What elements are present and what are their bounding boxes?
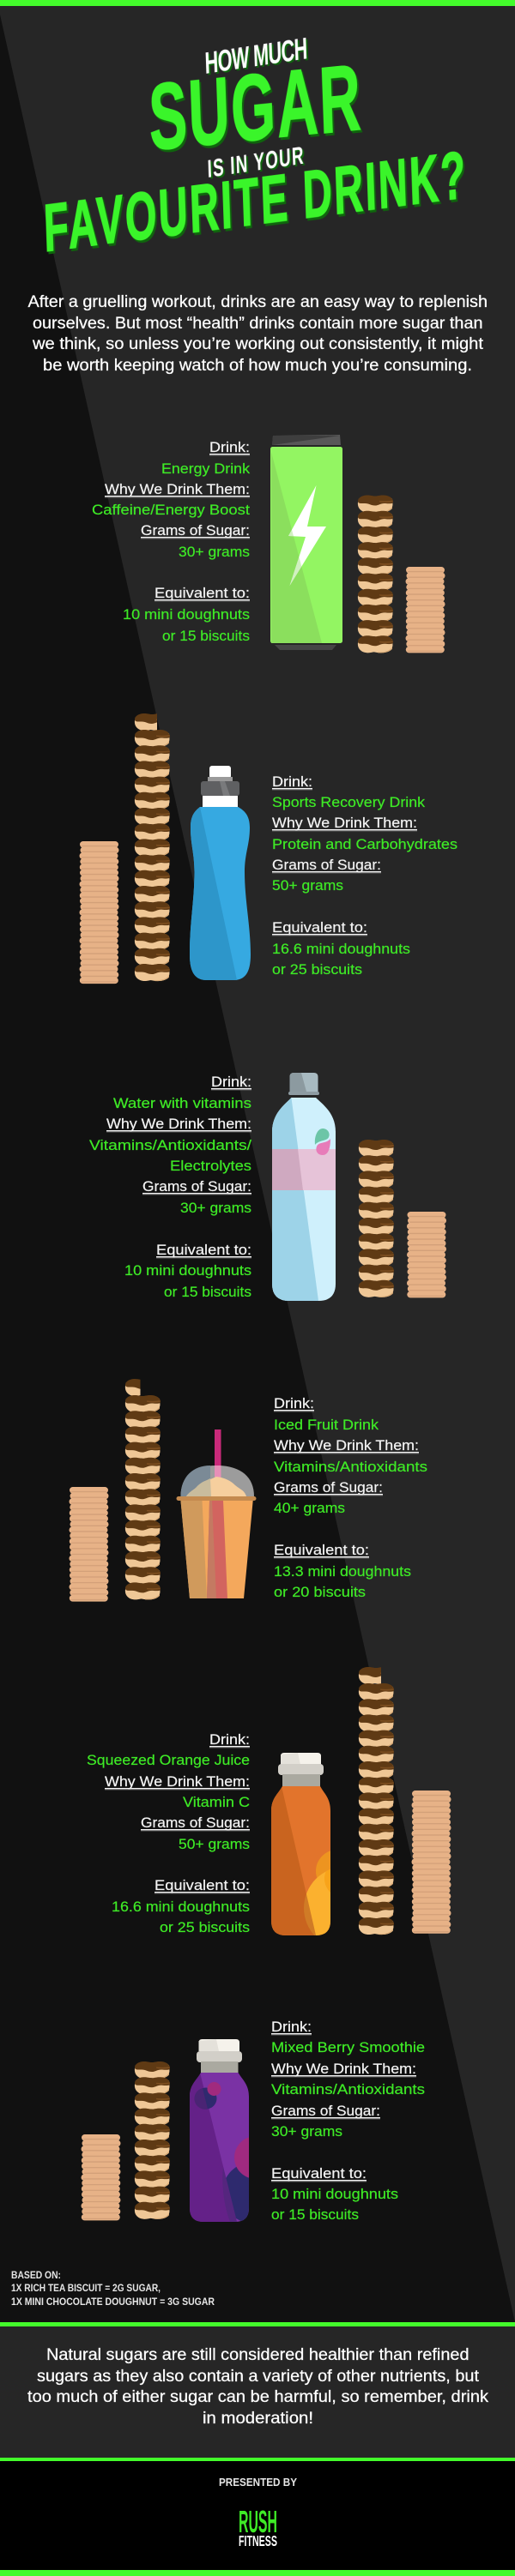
panel: footer: RUSH (239, 2504, 277, 2539)
panel: sports recovery drink (79, 713, 457, 984)
text block: water facts: or 15 biscuits (164, 1284, 251, 1300)
doughnut stack: 10 (359, 1140, 394, 1297)
text block: iced fruit facts: Grams of Sugar: (274, 1479, 383, 1496)
intro text: we think, so unless you’re working out consistently, it might (32, 335, 484, 353)
text block: smoothie facts: Equivalent to: (271, 2165, 367, 2182)
text block: sports recovery facts: Sports Recovery Drink (272, 794, 426, 810)
text block: energy drink facts: Drink: (209, 439, 250, 455)
icon: smoothie bottle (190, 2039, 249, 2222)
doughnut stack: 10 (358, 496, 393, 653)
text block: sports recovery facts (272, 773, 457, 978)
bottom green bar (0, 2570, 515, 2576)
panel: water with vitamins (89, 1073, 446, 1301)
panel: footer (0, 2461, 515, 2570)
icon: sports bottle (190, 766, 251, 980)
conclusion text: in moderation! (203, 2410, 313, 2428)
logo: rush fitness (239, 2504, 277, 2549)
title line: is in your: IS IN YOUR (207, 142, 304, 184)
text block: orange juice facts: Grams of Sugar: (141, 1815, 250, 1831)
title line: favourite drink: FAVOURITE DRINK? (43, 137, 466, 266)
text block: orange juice facts: 16.6 mini doughnuts (112, 1899, 250, 1915)
text block: iced fruit facts: Why We Drink Them: (274, 1437, 419, 1454)
biscuit stack: 25 (79, 841, 118, 984)
panel: iced fruit drink (69, 1379, 427, 1602)
doughnut stack: 16.6 (135, 713, 170, 981)
panel: conclusion (0, 2326, 515, 2458)
text block: water facts: Drink: (211, 1074, 251, 1090)
text block: iced fruit facts: Iced Fruit Drink (274, 1417, 379, 1433)
intro text: ourselves. But most “health” drinks contain more sugar than (33, 315, 482, 333)
conclusion text: sugars as they also contain a variety of other nutrients, but (37, 2368, 480, 2386)
intro text: After a gruelling workout, drinks are an easy way to replenish (27, 293, 488, 311)
text block: energy drink facts: or 15 biscuits (162, 628, 250, 644)
text block: water facts: Vitamins/Antioxidants/ (89, 1137, 251, 1153)
text block: orange juice facts: or 25 biscuits (160, 1919, 250, 1935)
text block: iced fruit facts: Drink: (274, 1395, 314, 1411)
panel: energy drink (92, 435, 445, 653)
text block: water facts: Water with vitamins (113, 1095, 251, 1111)
text block: sports recovery facts: or 25 biscuits (272, 961, 362, 978)
title line: how much: HOW MUCH (204, 33, 308, 81)
intro text (27, 293, 488, 375)
text block: smoothie facts (271, 2019, 425, 2223)
text block: smoothie facts: 10 mini doughnuts (271, 2186, 398, 2202)
text block: smoothie facts: Grams of Sugar: (271, 2103, 380, 2119)
text block: smoothie facts: or 15 biscuits (271, 2206, 359, 2223)
text block: orange juice facts: Why We Drink Them: (105, 1773, 250, 1790)
text block: water facts: 30+ grams (180, 1200, 251, 1216)
icon: water bottle (272, 1073, 336, 1301)
text block: sports recovery facts: 16.6 mini doughnuts (272, 941, 410, 957)
biscuit stack: 15 (81, 2134, 120, 2220)
biscuit stack: 25 (412, 1791, 451, 1934)
logo: rush fitness: FITNESS (239, 2532, 277, 2549)
footnote: based on: 1X MINI CHOCOLATE DOUGHNUT = 3G SUGAR (11, 2297, 215, 2308)
text block: iced fruit facts: 40+ grams (274, 1500, 345, 1516)
text block: energy drink facts (92, 439, 251, 644)
text block: energy drink facts: 30+ grams (179, 544, 250, 560)
text block: sports recovery facts: Why We Drink Them: (272, 815, 417, 831)
footnote: based on (11, 2271, 215, 2308)
text block: energy drink facts: Grams of Sugar: (141, 522, 250, 539)
text block: smoothie facts: Mixed Berry Smoothie (271, 2039, 425, 2055)
text block: orange juice facts: Equivalent to: (154, 1877, 250, 1893)
intro text: be worth keeping watch of how much you’re consuming. (43, 357, 472, 375)
icon: orange juice bottle (271, 1753, 330, 1935)
footnote: based on: BASED ON: (11, 2271, 61, 2281)
doughnut stack: 10 (135, 2061, 170, 2219)
text block: energy drink facts: Caffeine/Energy Boost (92, 502, 250, 518)
doughnut stack: 16.6 (359, 1667, 394, 1935)
text block: sports recovery facts: Equivalent to: (272, 919, 367, 936)
text block: sports recovery facts: Grams of Sugar: (272, 857, 381, 873)
presented by: PRESENTED BY (219, 2477, 298, 2489)
biscuit stack: 15 (405, 567, 445, 653)
text block: smoothie facts: Drink: (271, 2019, 312, 2035)
text block: water facts: 10 mini doughnuts (124, 1262, 251, 1279)
text block: energy drink facts: 10 mini doughnuts (123, 606, 250, 623)
text block: orange juice facts: Vitamin C (183, 1794, 250, 1810)
text block: orange juice facts: 50+ grams (179, 1836, 250, 1852)
doughnut stack: 13.3 (125, 1379, 161, 1600)
text block: iced fruit facts: 13.3 mini doughnuts (274, 1563, 411, 1580)
text block: iced fruit facts: or 20 biscuits (274, 1584, 366, 1600)
biscuit stack: 20 (69, 1487, 108, 1602)
text block: smoothie facts: Vitamins/Antioxidants (271, 2081, 425, 2098)
panel: mixed berry smoothie (81, 2019, 425, 2224)
text block: iced fruit facts (274, 1395, 427, 1600)
text block: sports recovery facts: Drink: (272, 773, 312, 790)
text block: orange juice facts (87, 1731, 250, 1935)
text block: sports recovery facts: Protein and Carbohydrates (272, 836, 457, 852)
text block: orange juice facts: Drink: (209, 1731, 250, 1748)
text block: energy drink facts: Equivalent to: (154, 585, 250, 601)
text block: smoothie facts: 30+ grams (271, 2123, 342, 2140)
conclusion text: too much of either sugar can be harmful, so remember, drink (27, 2388, 489, 2406)
title (43, 33, 466, 266)
icon: iced drink cup (177, 1429, 256, 1598)
icon: energy drink can (270, 435, 342, 650)
text block: sports recovery facts: 50+ grams (272, 877, 343, 894)
text block: orange juice facts: Squeezed Orange Juice (87, 1752, 250, 1768)
text block: energy drink facts: Why We Drink Them: (105, 481, 250, 497)
footnote: based on: 1X RICH TEA BISCUIT = 2G SUGAR, (11, 2284, 161, 2294)
text block: smoothie facts: Why We Drink Them: (271, 2061, 416, 2077)
text block: water facts: Why We Drink Them: (106, 1116, 251, 1132)
biscuit stack: 15 (407, 1212, 446, 1297)
text block: iced fruit facts: Vitamins/Antioxidants (274, 1459, 427, 1475)
conclusion text: Natural sugars are still considered healthier than refined (46, 2346, 469, 2364)
green divider (0, 2458, 515, 2461)
text block: water facts: Electrolytes (170, 1158, 251, 1174)
text block: iced fruit facts: Equivalent to: (274, 1542, 369, 1558)
title line: sugar: SUGAR (148, 45, 362, 171)
text block: energy drink facts: Energy Drink (161, 460, 251, 477)
text block: water facts (89, 1074, 251, 1300)
text block: water facts: Grams of Sugar: (142, 1178, 251, 1195)
top green bar (0, 0, 515, 6)
panel: squeezed orange juice (87, 1667, 451, 1949)
conclusion text (27, 2346, 489, 2428)
green divider (0, 2322, 515, 2326)
text block: water facts: Equivalent to: (156, 1242, 251, 1258)
